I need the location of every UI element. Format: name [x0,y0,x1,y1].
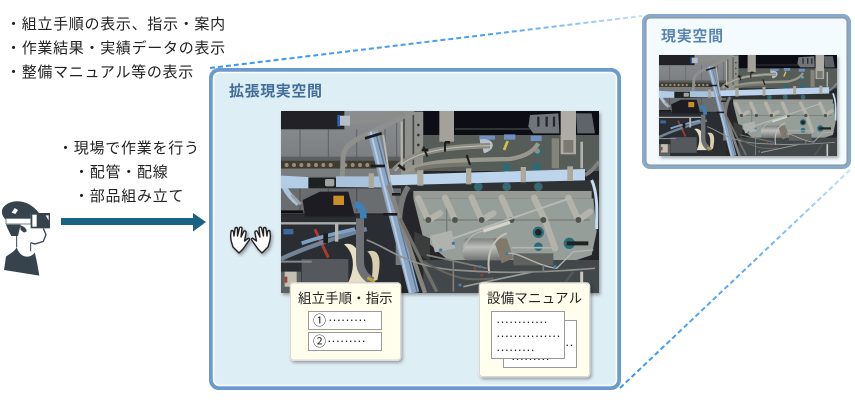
bullet list: field work: ・部品組み立て [74,188,184,205]
dashed connector: lower [620,169,851,388]
front sheet: ......... [497,343,536,353]
icon: person wearing AR headset [2,201,50,276]
arrow: to AR space [61,213,206,232]
card: assembly procedure [290,283,400,360]
back sheet [504,320,576,368]
card: maintenance manual: 設備マニュアル [487,291,582,306]
front sheet: ............ [497,315,549,325]
panel: real space [644,16,849,167]
step 1: ......... [329,313,368,323]
dashed connector: upper [210,16,642,68]
step 2 [308,332,382,350]
bullet list: AR display contents: ・整備マニュアル等の表示 [6,63,194,81]
photo: engine, real view [659,55,837,156]
card: assembly procedure: 組立手順・指示 [298,291,393,306]
step 2: ......... [328,334,367,344]
step 2: ② [313,334,326,349]
step 1 [308,312,382,330]
heading: real space: 現実空間 [661,27,724,45]
front sheet [492,312,564,358]
back sheet: .. [566,338,575,348]
panel: augmented reality space [211,70,619,388]
bullet list: AR display contents [6,16,226,81]
bullet list: field work [58,140,200,205]
bullet list: field work: ・配管・配線 [74,163,169,181]
step 1: ① [313,313,326,328]
photo: engine, AR view [281,111,599,293]
icon: gloved hands [231,227,270,253]
card: maintenance manual [480,283,590,376]
bullet list: field work: ・現場で作業を行う [58,140,200,157]
bullet list: AR display contents: ・作業結果・実績データの表示 [6,39,226,57]
bullet list: AR display contents: ・組立手順の表示、指示・案内 [6,16,226,33]
front sheet: ............... [497,329,562,339]
back sheet: ......... [512,352,551,362]
heading: AR space: 拡張現実空間 [229,82,323,100]
